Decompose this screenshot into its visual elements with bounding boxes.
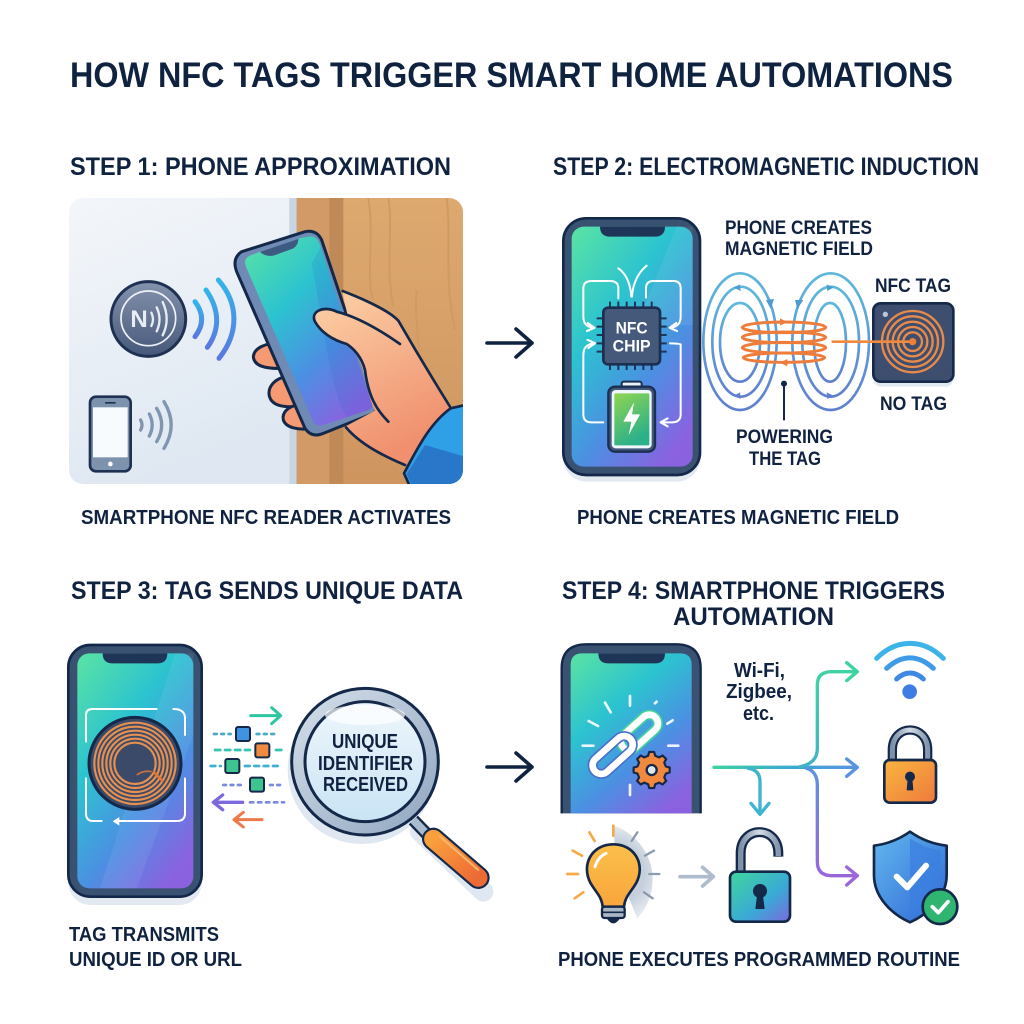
magnifier text: unique identifier received: IDENTIFIER [318,753,413,775]
label: wi-fi, zigbee, etc.: Zigbee, [726,681,792,703]
icon: tag coil [89,717,181,809]
icon: chain link [589,711,661,777]
heading: step 4: AUTOMATION [673,603,834,631]
label: phone creates magnetic field: PHONE CREATES [725,218,872,239]
diagram: induction coil [742,318,826,366]
heading: step 1: STEP 1: PHONE APPROXIMATION [70,153,451,181]
icon: nfc wall tag: N [130,306,148,333]
label: phone creates magnetic field: MAGNETIC FIELD [725,239,873,260]
heading: step 3: STEP 3: TAG SENDS UNIQUE DATA [71,577,463,605]
panel: step 4 illustration [562,643,957,924]
magnifier text: unique identifier received [318,731,413,796]
label: wi-fi, zigbee, etc.: Wi-Fi, [734,660,785,682]
diagram: automation flow arrows [714,663,857,885]
icon: magnifying glass [288,688,483,892]
diagram: magnetic field loops [703,273,869,410]
label: powering the tag: POWERING [736,427,833,448]
diagram: data exchange [211,708,284,827]
magnifier text: unique identifier received: RECEIVED [323,774,408,796]
icon: nfc chip: NFC [616,318,648,337]
caption: step 1: SMARTPHONE NFC READER ACTIVATES [81,507,451,529]
icon: light bulb [567,826,659,923]
caption: step 4: PHONE EXECUTES PROGRAMMED ROUTINE [558,949,960,971]
heading: step 4 [562,577,945,631]
title: HOW NFC TAGS TRIGGER SMART HOME AUTOMATIONS [70,56,953,95]
caption: step 2: PHONE CREATES MAGNETIC FIELD [577,507,899,529]
panel: step 3 illustration [68,645,483,905]
panel: step 2 illustration [563,218,953,482]
arrow: step 3 to step 4 [487,753,532,781]
label: wi-fi, zigbee, etc.: etc. [743,703,774,725]
label: no tag: NO TAG [880,394,947,415]
icon: nfc wall tag [111,282,186,356]
pointer: powering the tag [781,381,787,420]
heading: step 4: STEP 4: SMARTPHONE TRIGGERS [562,577,945,605]
icon: phone with nfc chip [563,218,700,482]
label: powering the tag: THE TAG [749,449,821,470]
icon: nfc chip [597,302,667,370]
icon: closed padlock [884,730,936,803]
icon: battery [608,382,655,452]
icon: shield with check [874,832,957,924]
panel: step 1 illustration [69,198,465,487]
icon: nfc chip: CHIP [613,337,651,356]
icon: hand holding phone [235,231,465,487]
icon: open padlock [730,832,790,922]
label: wi-fi, zigbee, etc. [726,660,792,725]
icon: phone with link and gear [562,644,701,813]
arrow: step 1 to step 2 [487,329,532,357]
caption: step 3: UNIQUE ID OR URL [69,949,242,971]
label: nfc tag: NFC TAG [875,276,951,297]
arrow: light to open padlock [680,867,713,886]
icon: small phone with signal [90,397,171,471]
icon: signal waves from tag [195,280,234,358]
label: phone creates magnetic field [725,218,873,260]
icon: wifi [877,643,943,699]
caption: step 3 [69,924,242,971]
icon: phone with nfc tag [68,645,202,905]
icon: gear [634,752,670,788]
magnifier text: unique identifier received: UNIQUE [332,731,398,753]
label: powering the tag [736,427,833,470]
caption: step 3: TAG TRANSMITS [69,924,219,946]
icon: nfc tag [832,303,953,387]
